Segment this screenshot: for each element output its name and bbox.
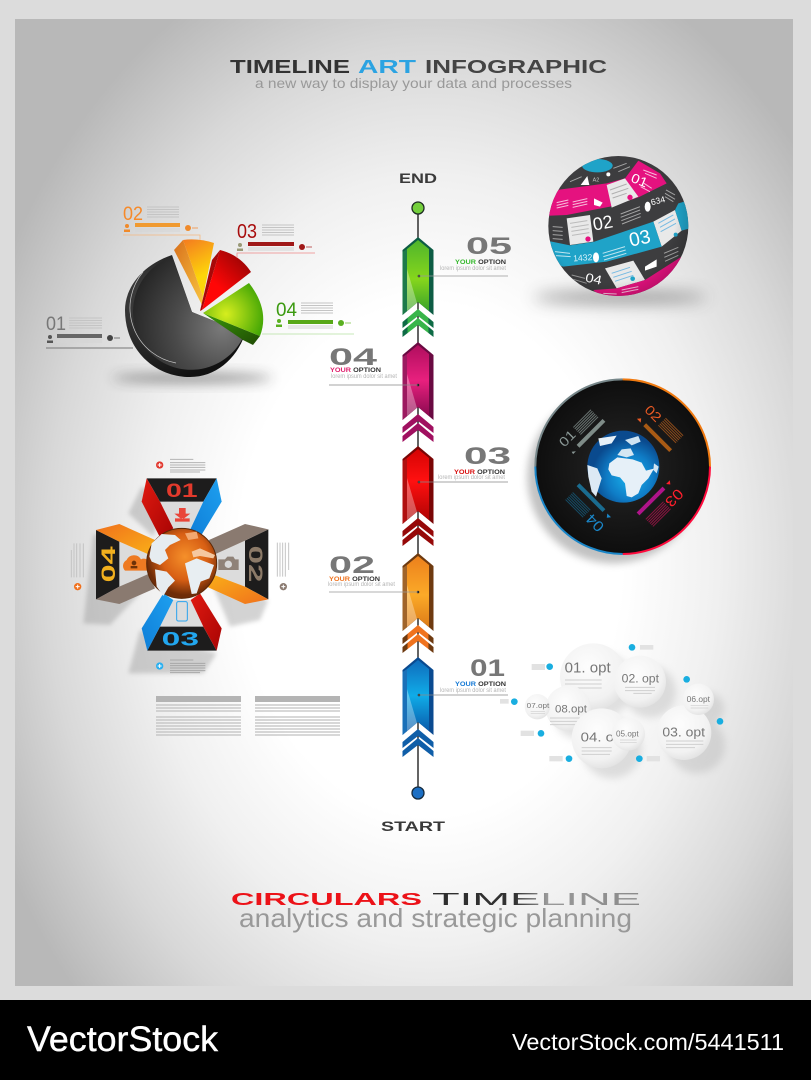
title: ART: [358, 57, 416, 77]
bubble 01: 01. opt: [565, 661, 611, 677]
cross shadows: [83, 487, 268, 673]
bubble 03: 03. opt: [662, 725, 705, 740]
pie label 04: 04: [276, 300, 297, 321]
inner panels: [119, 502, 245, 627]
panel 03 bottom: [142, 593, 222, 651]
quadrant 04: [562, 483, 614, 534]
timeline label 03: YOUR OPTION: [454, 469, 505, 476]
quadrant 03: 03: [661, 485, 686, 509]
bubble 08: 08.opt: [555, 703, 587, 715]
sphere figures: [573, 177, 666, 263]
title: INFOGRAPHIC: [425, 57, 607, 77]
brand right: VectorStock.com/5441511: [512, 1029, 784, 1055]
bubble 03: [657, 705, 711, 760]
sphere shadow: [533, 291, 707, 303]
timeline label 03: 03: [464, 443, 511, 470]
panel 04 left: 04: [99, 546, 120, 582]
bubble shadows: [555, 652, 725, 778]
bubble 07: [525, 694, 550, 719]
pie label 04: [262, 300, 354, 334]
sphere numbers: 01: [629, 170, 650, 190]
panel 04 left: [96, 524, 155, 604]
timeline label 01: [418, 655, 508, 695]
quadrant 01: [556, 406, 605, 455]
arrow 05 green: [402, 237, 434, 337]
bubbles infographic: [500, 643, 725, 778]
panel 02 right: [207, 524, 268, 604]
footer subtitle: analytics and strategic planning: [239, 903, 632, 933]
subtitle: a new way to display your data and processes: [255, 75, 572, 91]
panel 02 right: 02: [244, 546, 265, 582]
timeline spine: [412, 202, 424, 799]
note 04: [71, 543, 83, 590]
footer title: CIRCULARS: [231, 889, 422, 909]
timeline label 04: YOUR OPTION: [330, 367, 381, 374]
bubble 06: [683, 684, 714, 715]
title: [230, 57, 607, 77]
pie shadow: [112, 373, 272, 383]
timeline label 01: YOUR OPTION: [455, 681, 506, 688]
bubble 05: [612, 717, 645, 751]
text block left: [156, 696, 241, 735]
disc shadow: [527, 391, 699, 563]
panel 01 top: [142, 478, 222, 537]
note 02: [277, 543, 289, 590]
sphere figures: A2: [593, 177, 599, 183]
quadrant 01: 01: [556, 427, 579, 450]
timeline label 01: lorem ipsum dolor sit amet: [440, 687, 506, 694]
sphere text bars: [553, 163, 678, 294]
text block right: [255, 696, 340, 735]
timeline label 04: lorem ipsum dolor sit amet: [331, 373, 397, 380]
timeline label 04: 04: [329, 344, 378, 371]
watermark bar: [0, 1000, 811, 1080]
bubble 04: 04. o: [581, 730, 614, 745]
pie slice 04 green: [203, 283, 263, 345]
bubble 06: 06.opt: [687, 695, 711, 704]
quadrant 03: [637, 480, 686, 529]
label: start: START: [381, 819, 446, 834]
disc: [535, 379, 710, 554]
icon: cloud person: [123, 555, 150, 571]
pie label 03: [237, 221, 315, 258]
timeline label 02: [328, 552, 418, 592]
end node: [412, 202, 424, 214]
timeline label 05: YOUR OPTION: [455, 259, 506, 266]
sphere numbers: 02: [591, 211, 614, 235]
black circular infographic: [527, 379, 710, 563]
timeline label 05: [418, 233, 512, 276]
quadrant 02: 02: [642, 402, 665, 425]
globe: orange: [147, 528, 217, 598]
pie label 02: [123, 204, 200, 240]
globe: blue: [587, 431, 659, 503]
icon: phone: [177, 602, 187, 621]
timeline label 04: [329, 344, 418, 385]
timeline label 02: YOUR OPTION: [329, 576, 380, 583]
timeline label 01: 01: [470, 655, 505, 682]
timeline label 05: 05: [466, 233, 512, 260]
cross infographic: [71, 459, 289, 673]
sphere numbers: [586, 174, 650, 284]
bubble 04: [572, 708, 632, 768]
pie label 03: 03: [237, 221, 257, 243]
timeline label 03: lorem ipsum dolor sit amet: [438, 474, 505, 481]
pie slice 03 red: [200, 250, 251, 311]
pie slice 02 orange: [174, 239, 214, 305]
bubble 08: [546, 686, 591, 731]
timeline label 03: [418, 443, 511, 482]
arrow 01 blue: [402, 657, 434, 757]
title: TIMELINE: [230, 57, 350, 77]
bubble 05: 05.opt: [616, 730, 639, 739]
sphere figures: 634: [650, 194, 666, 207]
sphere numbers: 04: [584, 271, 603, 288]
timeline label 02: lorem ipsum dolor sit amet: [328, 581, 395, 588]
bubble connector dots: [511, 644, 723, 762]
panel 01 top: 01: [166, 481, 198, 502]
sphere figures: 1432: [573, 252, 593, 263]
pie slice 01 black: [125, 255, 245, 377]
coloured ring: [535, 379, 710, 554]
footer title: TIMELINE: [432, 889, 641, 909]
quadrant 02: [636, 402, 686, 452]
brand left: VectorStock: [27, 1019, 218, 1059]
arrow 03 red: [402, 446, 434, 546]
pie label 01: 01: [46, 314, 66, 335]
timeline label 05: lorem ipsum dolor sit amet: [440, 265, 506, 272]
icon: download: [175, 508, 189, 521]
note 01: [156, 459, 205, 472]
start node: [412, 787, 424, 799]
label: end: END: [399, 171, 437, 186]
bubble 07: 07.opt: [527, 701, 549, 710]
sphere numbers: 03: [627, 227, 653, 252]
icon: camera: [218, 557, 239, 570]
sphere infographic: [533, 153, 707, 303]
note 03: [156, 660, 205, 673]
sphere icons: [581, 172, 657, 271]
quadrant 04: 04: [583, 510, 608, 534]
panel 03 bottom: 03: [162, 630, 199, 651]
bubble 02: 02. opt: [622, 671, 660, 685]
pie label 01: [46, 314, 133, 348]
bubble connector tags: [500, 645, 660, 761]
arrow 04 magenta: [402, 342, 434, 442]
timeline label 02: 02: [329, 552, 375, 579]
pie label 02: 02: [123, 204, 143, 225]
arrow 02 orange: [402, 553, 434, 653]
bubble 02: [614, 656, 666, 708]
bubble 01: [560, 643, 627, 710]
sphere tiles: [548, 156, 688, 296]
footer title: [231, 889, 641, 909]
3D pie chart: [112, 239, 272, 383]
